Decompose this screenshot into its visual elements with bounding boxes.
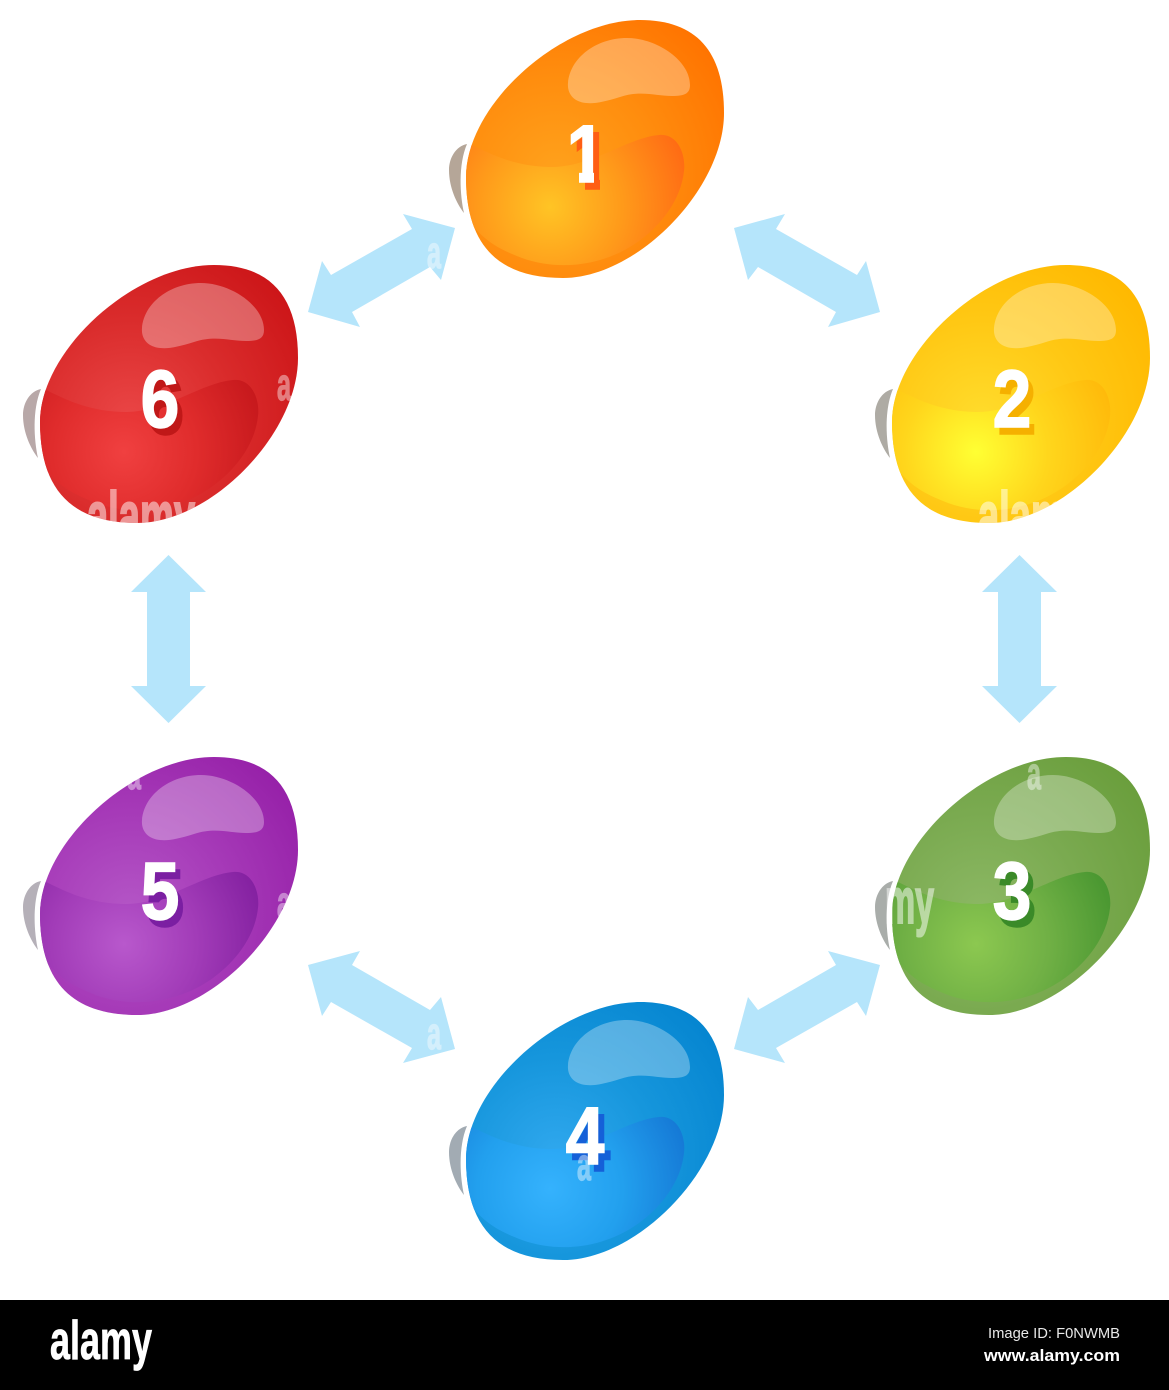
gloss highlight [994, 283, 1116, 348]
footer logo: alamy [50, 1309, 152, 1371]
scattered watermark letters [127, 227, 1042, 1190]
node 3: green bubble [875, 757, 1150, 1015]
number 1: 1 [573, 116, 611, 207]
scattered watermark letters: a [577, 1139, 592, 1190]
side shadow crescent [875, 881, 893, 950]
scattered watermark letters: a [127, 748, 142, 799]
lower shade [887, 872, 1110, 1002]
gloss highlight [142, 283, 264, 348]
side shadow crescent [875, 389, 893, 458]
node 5: purple bubble [23, 757, 298, 1015]
bubble body [40, 757, 298, 1015]
footer bar [0, 1300, 1169, 1390]
scattered watermark letters: a [1027, 748, 1042, 799]
number 3: 3 [993, 846, 1031, 937]
bubble body [892, 757, 1150, 1015]
bubble body [40, 265, 298, 523]
number 2: 2 [993, 354, 1031, 445]
node 6: red bubble [23, 265, 298, 523]
number 1: 1 [567, 109, 605, 200]
gloss highlight [142, 775, 264, 840]
number 4: 4 [572, 1098, 610, 1189]
arrow: between 1 and 2 [734, 214, 880, 327]
gloss highlight [568, 38, 690, 103]
scattered watermark letters: a [277, 359, 292, 410]
lower shade [35, 380, 258, 510]
arrow: between 3 and 4 [734, 951, 880, 1063]
bubble body [892, 265, 1150, 523]
number 4: 4 [566, 1091, 604, 1182]
number 1 [570, 125, 600, 190]
number 3: 3 [998, 853, 1036, 944]
node 4: blue bubble [449, 1002, 724, 1260]
arrow: between 5 and 6 [131, 555, 206, 723]
node 1: orange bubble [449, 20, 724, 278]
scattered watermark letters: a [427, 1008, 442, 1059]
website: www.alamy.com [983, 1346, 1120, 1365]
gloss highlight [568, 1020, 690, 1085]
arrow: between 4 and 5 [308, 951, 455, 1063]
number 6: 6 [146, 361, 184, 452]
side shadow crescent [449, 1126, 467, 1195]
node 2: yellow bubble [875, 265, 1150, 523]
side shadow crescent [23, 389, 41, 458]
lower shade [887, 380, 1110, 510]
lower shade [461, 1117, 684, 1247]
gloss highlight [994, 775, 1116, 840]
number 5: 5 [146, 853, 184, 944]
bubble body [466, 20, 724, 278]
side shadow crescent [23, 881, 41, 950]
arrow: between 2 and 3 [982, 555, 1057, 723]
number 5: 5 [141, 846, 179, 937]
bubble body [466, 1002, 724, 1260]
watermark: alamy [87, 478, 195, 552]
side shadow crescent [449, 144, 467, 213]
lower shade [40, 872, 258, 990]
image id: Image ID: F0NWMB [988, 1325, 1120, 1342]
number 6: 6 [141, 354, 179, 445]
watermark: alamy [978, 478, 1086, 552]
watermark: my [885, 865, 934, 937]
scattered watermark letters: a [427, 227, 442, 278]
lower shade [461, 135, 684, 265]
arrow: between 6 and 1 [308, 214, 455, 327]
number 2: 2 [998, 361, 1036, 452]
scattered watermark letters: a [277, 877, 292, 928]
